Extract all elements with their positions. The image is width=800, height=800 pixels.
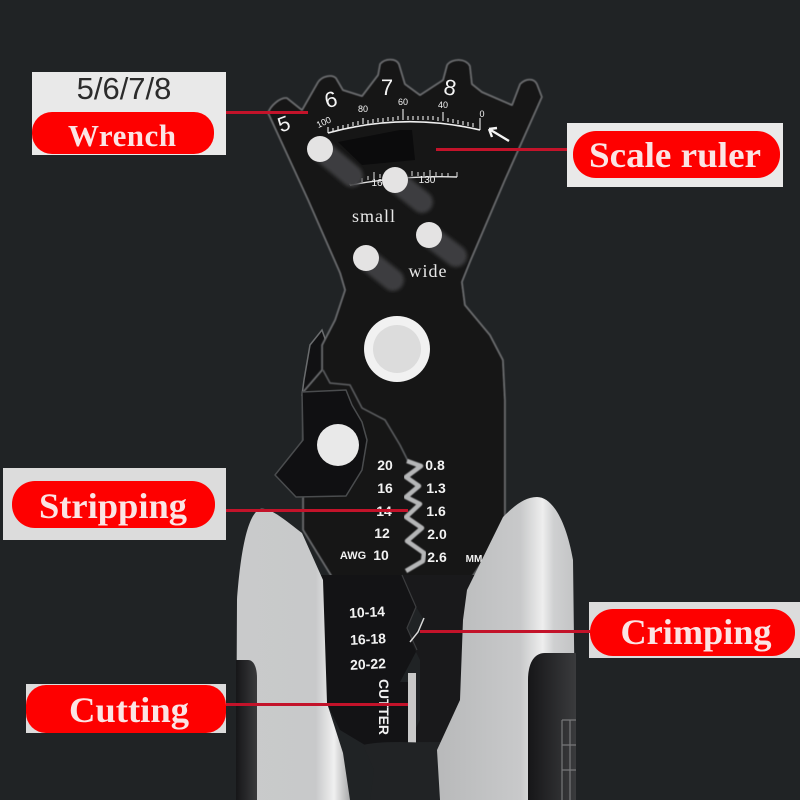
- crimp labels: [349, 603, 392, 735]
- callout: crimping: [420, 602, 800, 658]
- leader line: scale ruler: [436, 148, 567, 151]
- lower scale: 16: [371, 178, 383, 189]
- ruler scale: 80: [358, 104, 368, 114]
- callout: cutting: Cutting: [69, 690, 189, 730]
- leader line: stripping: [226, 509, 408, 512]
- crimp labels: 20-22: [350, 655, 387, 673]
- wire gauge numbers: 2.0: [427, 526, 447, 542]
- stripping notches: [406, 461, 424, 571]
- wrench sizes: 7: [381, 75, 393, 100]
- wire gauge numbers: 1.3: [426, 480, 446, 496]
- callout: cutting: [26, 684, 408, 733]
- wire gauge numbers: 16: [377, 480, 393, 496]
- callout: wrench: 5/6/7/8: [77, 71, 171, 106]
- lower scale: 130: [419, 175, 436, 186]
- wire gauge numbers: MM: [466, 554, 482, 565]
- wrench sizes: 6: [322, 86, 340, 113]
- small and wide labels: wide: [408, 261, 448, 281]
- slot shadows: [322, 151, 456, 280]
- callout: scale ruler: Scale ruler: [589, 135, 761, 175]
- callout: stripping: Stripping: [39, 486, 187, 526]
- ruler scale: 60: [398, 97, 408, 107]
- leader line: crimping: [420, 630, 590, 633]
- wire gauge numbers: 2.6: [427, 549, 447, 565]
- ruler scale: 40: [438, 100, 448, 110]
- wire gauge numbers: 12: [374, 525, 390, 541]
- wrench sizes: [275, 74, 458, 137]
- crimp labels: 10-14: [349, 603, 386, 621]
- ruler scale: [315, 97, 485, 133]
- body edge highlight: [323, 370, 408, 461]
- crimp labels: CUTTER: [376, 679, 392, 735]
- wrench opening: [338, 130, 415, 165]
- leader line: wrench: [226, 111, 308, 114]
- tool head and body: [268, 60, 542, 582]
- wire gauge numbers: AWG: [340, 550, 366, 562]
- small and wide labels: [352, 206, 448, 281]
- wire gauge numbers: 14: [376, 503, 392, 519]
- lower jaws: [318, 575, 475, 748]
- ruler scale: 100: [315, 115, 333, 130]
- wire gauge numbers: 10: [373, 547, 389, 563]
- wire gauge numbers: 20: [377, 457, 393, 473]
- wire gauge numbers: 0.8: [425, 457, 445, 473]
- crimp labels: 16-18: [350, 630, 387, 648]
- plier tool: [236, 60, 576, 800]
- lower scale: [350, 170, 457, 189]
- left handle: [236, 509, 350, 800]
- callout: scale ruler: [436, 123, 783, 187]
- central pivot: [364, 316, 430, 382]
- wrench sizes: 5: [275, 112, 294, 137]
- callout: wrench: [32, 71, 308, 155]
- ruler scale: 0: [479, 109, 485, 119]
- wrench sizes: 8: [442, 74, 458, 101]
- right handle: [437, 497, 576, 800]
- back jaw behind body: [302, 330, 345, 395]
- wire gauge numbers: 1.6: [426, 503, 446, 519]
- icon: arrow: [489, 128, 509, 141]
- pins: [307, 136, 442, 271]
- small and wide labels: small: [352, 206, 396, 226]
- wire gauge numbers: [340, 457, 482, 565]
- callout: stripping: [3, 468, 408, 540]
- callout: crimping: Crimping: [620, 612, 772, 652]
- neck: [363, 742, 440, 800]
- callout: wrench: Wrench: [68, 118, 176, 153]
- leader line: cutting: [226, 703, 408, 706]
- lever: [275, 390, 367, 497]
